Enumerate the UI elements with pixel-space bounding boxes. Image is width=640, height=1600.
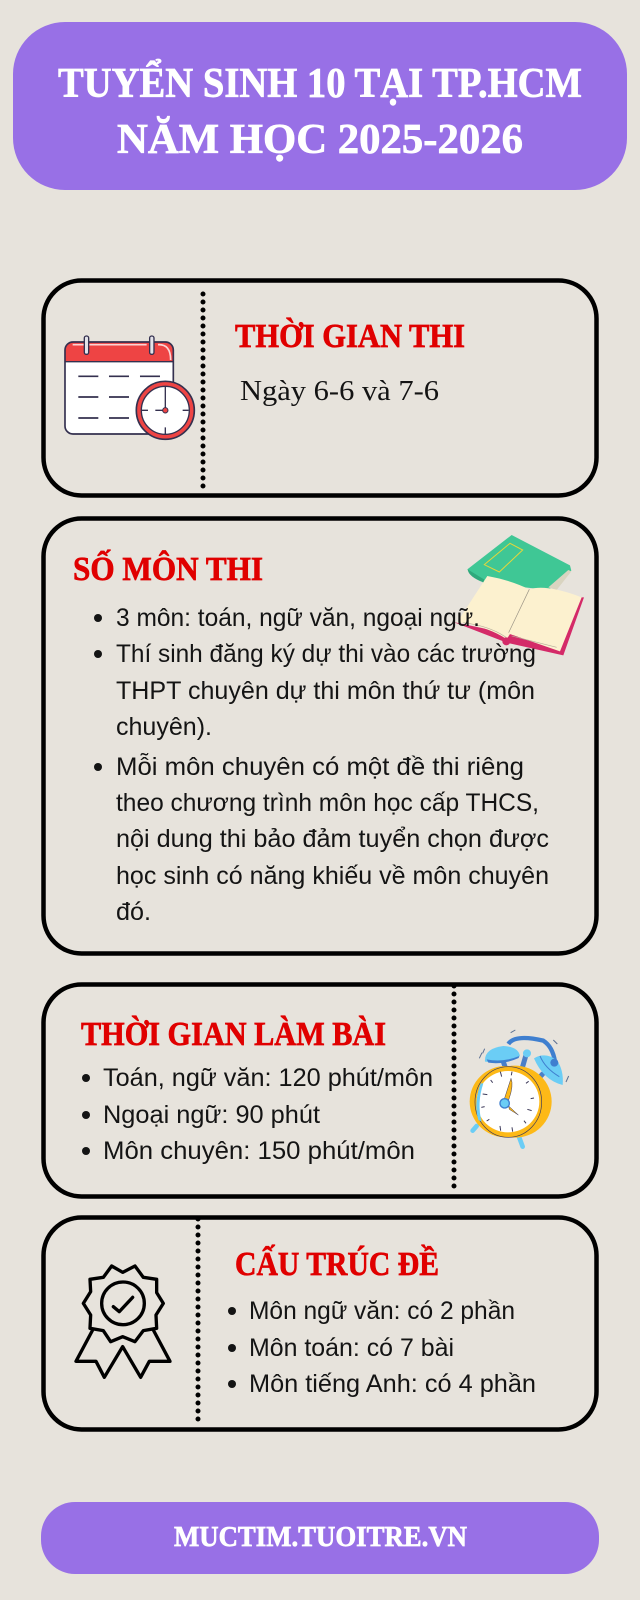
subject list: chuyên). (116, 713, 212, 741)
heading: exam structure: CẤU TRÚC ĐỀ (235, 1244, 439, 1283)
subject list: Thí sinh đăng ký dự thi vào các trường (116, 640, 536, 668)
subject list: 3 môn: toán, ngữ văn, ngoại ngữ. (116, 604, 480, 632)
title text (58, 58, 582, 163)
panel: number of subjects (44, 518, 596, 954)
subject list: nội dung thi bảo đảm tuyển chọn được (116, 825, 549, 853)
icon: award ribbon (76, 1266, 170, 1377)
structure list (228, 1297, 536, 1398)
subject list: đó. (116, 898, 151, 926)
icon: books (453, 535, 584, 655)
exam date text: Ngày 6-6 và 7-6 (240, 376, 439, 407)
panel: working time (44, 984, 596, 1196)
subject list: học sinh có năng khiếu về môn chuyên (116, 862, 549, 890)
title text: NĂM HỌC 2025-2026 (117, 116, 523, 163)
heading: number of subjects: SỐ MÔN THI (73, 549, 263, 588)
structure list: Môn ngữ văn: có 2 phần (249, 1297, 515, 1325)
footer text: MUCTIM.TUOITRE.VN (174, 1522, 467, 1553)
subject list (94, 604, 549, 926)
heading: exam time: THỜI GIAN THI (235, 317, 465, 355)
panel: exam structure (44, 1218, 596, 1430)
subject list: Mỗi môn chuyên có một đề thi riêng (116, 752, 524, 781)
heading: working time: THỜI GIAN LÀM BÀI (81, 1015, 386, 1053)
icon: alarm clock (470, 1030, 569, 1147)
title banner (13, 22, 627, 190)
structure list: Môn tiếng Anh: có 4 phần (249, 1370, 536, 1398)
duration list: Môn chuyên: 150 phút/môn (103, 1137, 415, 1165)
structure list: Môn toán: có 7 bài (249, 1334, 454, 1362)
duration list: Ngoại ngữ: 90 phút (103, 1101, 320, 1129)
duration list (82, 1064, 433, 1165)
icon: calendar with clock (65, 336, 194, 439)
subject list: theo chương trình môn học cấp THCS, (116, 789, 539, 817)
panel: exam time (44, 280, 596, 496)
footer banner (41, 1502, 599, 1574)
subject list: THPT chuyên dự thi môn thứ tư (môn (116, 677, 535, 705)
duration list: Toán, ngữ văn: 120 phút/môn (103, 1064, 433, 1092)
title text: TUYỂN SINH 10 TẠI TP.HCM (58, 58, 582, 107)
